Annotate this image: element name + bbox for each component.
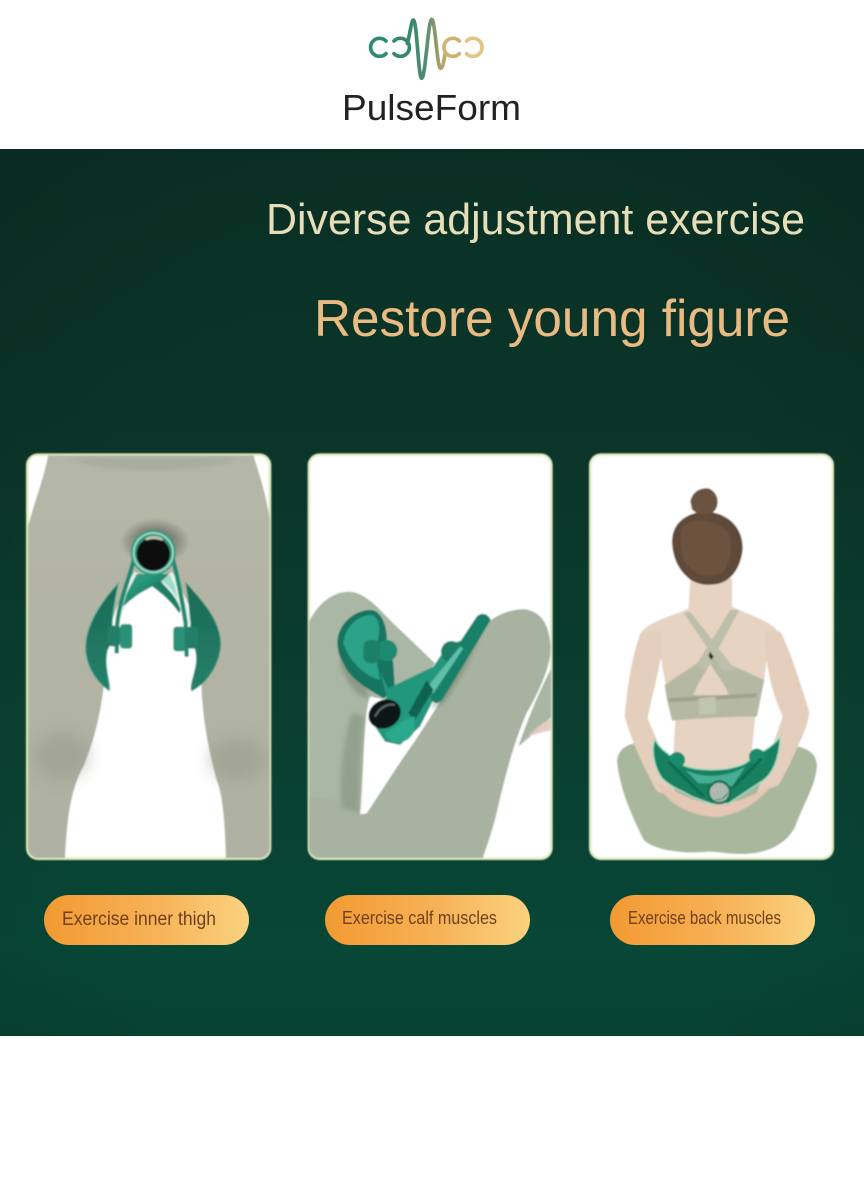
logo <box>342 19 521 128</box>
legs in grey leggings <box>28 455 271 859</box>
thigh exerciser device <box>337 610 491 745</box>
panel: back muscle exercise <box>590 455 833 859</box>
label pill: back muscles <box>610 895 815 945</box>
brand name: PulseForm <box>342 87 521 128</box>
label pill: inner thigh <box>44 895 249 945</box>
thigh exerciser device <box>86 530 220 691</box>
sports bra <box>665 650 764 721</box>
torso <box>640 578 779 778</box>
thigh exerciser device <box>653 737 780 804</box>
panel: calf muscle exercise <box>309 455 551 859</box>
subheading: Restore young figure: Restore young figure <box>314 290 790 348</box>
label pill: back muscles: Exercise back muscles <box>628 908 781 928</box>
left arm <box>625 630 677 798</box>
seated woman <box>617 488 817 854</box>
icon: pulse wave logo <box>371 19 482 78</box>
label pill: calf muscles: Exercise calf muscles <box>342 908 497 928</box>
label pill: inner thigh: Exercise inner thigh <box>62 909 216 930</box>
hands <box>664 788 769 818</box>
panel: inner thigh exercise <box>27 455 271 859</box>
legs in green leggings <box>309 592 551 859</box>
seated legs <box>617 743 817 854</box>
hair and bun <box>672 512 743 585</box>
heading: Diverse adjustment exercise: Diverse adjustment exercise <box>266 195 805 244</box>
right arm <box>757 630 809 793</box>
dark green banner background <box>0 149 864 1036</box>
label pill: calf muscles <box>325 895 530 945</box>
